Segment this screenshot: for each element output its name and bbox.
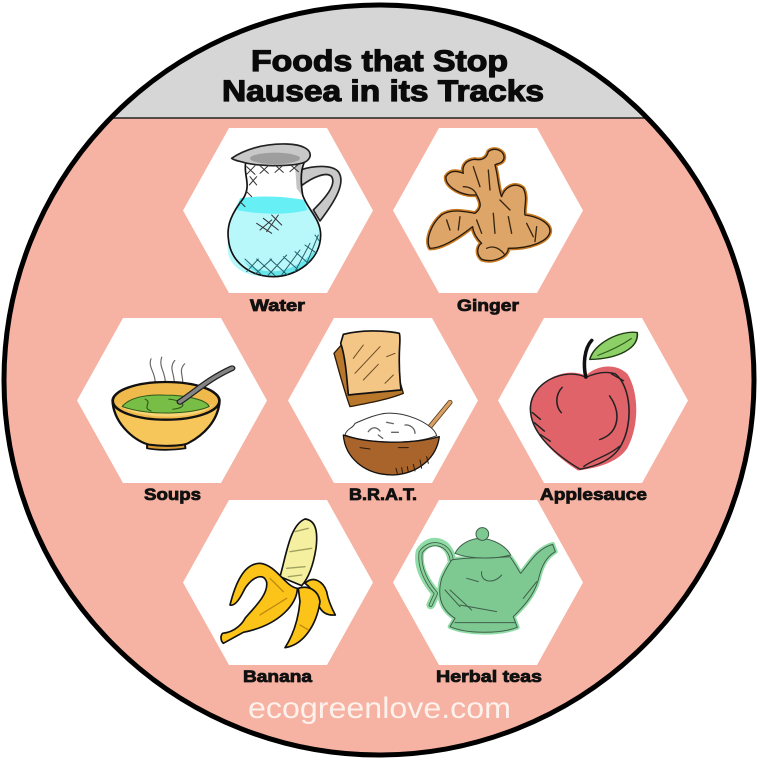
website credit: ecogreenlove.com xyxy=(248,692,511,725)
title: Foods that Stop xyxy=(251,45,508,78)
label: B.R.A.T.: B.R.A.T. xyxy=(349,485,417,504)
label: Applesauce: Applesauce xyxy=(540,485,647,504)
icon: green teapot xyxy=(419,528,555,632)
icon: ginger root xyxy=(428,149,550,261)
icon: peeled banana xyxy=(221,519,335,648)
hexagon: ginger xyxy=(393,128,583,293)
label: Banana: Banana xyxy=(243,667,313,686)
title xyxy=(222,45,544,108)
title: Nausea in its Tracks xyxy=(222,75,544,108)
icon: soup bowl xyxy=(113,357,232,450)
icon: red apple xyxy=(530,332,637,471)
panel: grey header xyxy=(115,8,643,118)
hexagon: soups xyxy=(77,318,267,483)
hexagon: brat xyxy=(288,318,478,483)
label: Soups: Soups xyxy=(144,485,201,504)
hexagon: water xyxy=(183,128,373,293)
icon: toast and rice bowl xyxy=(334,331,450,475)
label: Herbal teas: Herbal teas xyxy=(436,667,542,686)
hexagon: banana xyxy=(183,500,373,665)
icon: water pitcher xyxy=(228,144,341,277)
hexagon: herbal teas xyxy=(393,500,583,665)
hexagon: applesauce xyxy=(498,318,688,483)
label: Ginger: Ginger xyxy=(457,296,519,315)
label: Water: Water xyxy=(250,296,305,315)
